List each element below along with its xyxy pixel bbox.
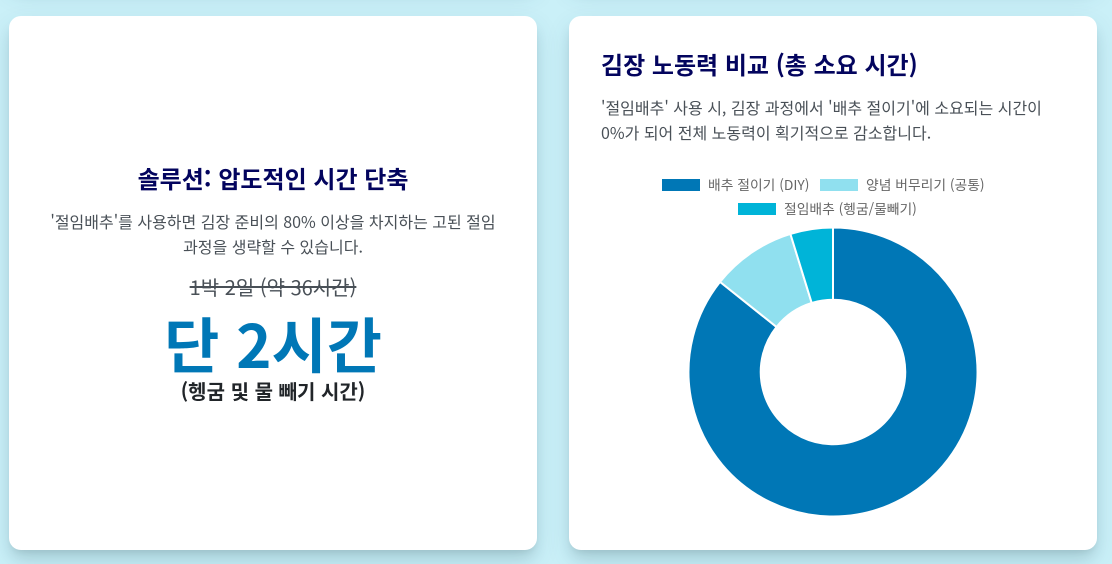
text block: labor description [601,95,1042,144]
text block: labor description: 0%가 되어 전체 노동력이 획기적으로 감소합니다. [601,120,931,144]
legend item: seasoning: 양념 버무리기 (공통) [866,174,985,194]
legend item: salting DIY: 배추 절이기 (DIY) [708,174,809,194]
panel: labor comparison [569,16,1097,550]
legend [662,174,985,218]
caption: new time: (헹굼 및 물 빼기 시간) [181,376,365,405]
panel: solution [9,16,537,550]
donut chart [689,228,977,516]
text block: solution description [50,209,496,258]
text block: solution description: 과정을 생략할 수 있습니다. [183,234,363,258]
text block: solution description: '절임배추'를 사용하면 김장 준비의 80% 이상을 차지하는 고된 절임 [50,209,496,233]
legend item: salting DIY [662,174,809,194]
text block: labor description: '절임배추' 사용 시, 김장 과정에서 '배추 절이기'에 소요되는 시간이 [601,95,1042,119]
legend item: salted cabbage: 절임배추 (헹굼/물빼기) [784,198,917,218]
segment: salting 36 of 42 [689,228,978,516]
old time struck through: 1박 2일 (약 36시간) [190,272,356,301]
heading: labor comparison: 김장 노동력 비교 (총 소요 시간) [601,46,918,81]
heading: solution: 솔루션: 압도적인 시간 단축 [138,160,408,195]
big number: new time: 단 2시간 [164,299,382,386]
segment: salted cabbage 2 of 42 [790,228,833,303]
segment: seasoning 4 of 42 [720,234,812,327]
